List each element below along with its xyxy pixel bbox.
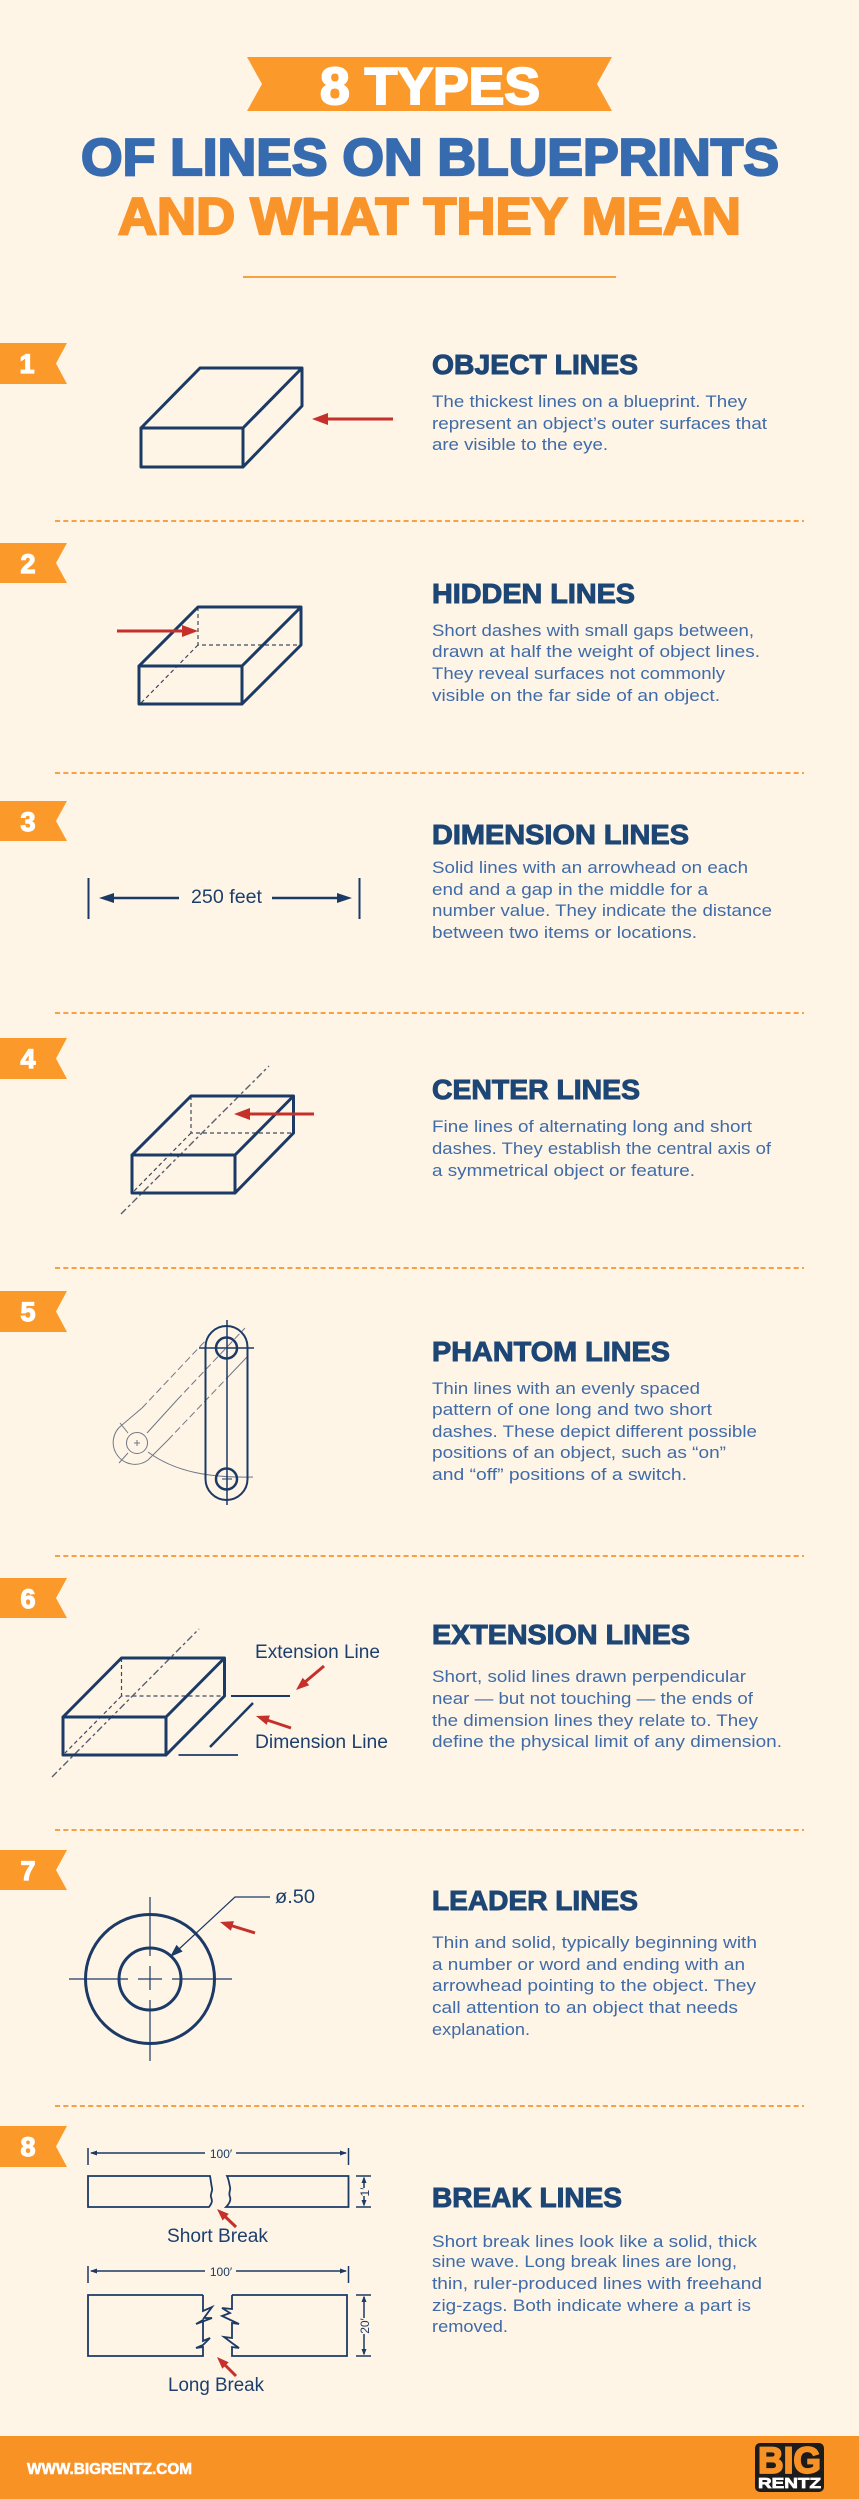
description: center lines: a symmetrical object or feature. <box>432 1161 695 1180</box>
description: hidden lines: visible on the far side of an object. <box>432 686 720 705</box>
title line: of lines on blueprints: OF LINES ON BLUEPRINTS <box>81 129 779 187</box>
icon: solid box with arrow <box>141 368 393 467</box>
label: dimension line: Dimension Line <box>255 1732 388 1753</box>
description: dimension lines: end and a gap in the middle for a <box>432 880 709 899</box>
number flag 4: 4 <box>20 1044 36 1074</box>
number flag 3: 3 <box>20 807 36 837</box>
red arrows <box>256 1666 324 1728</box>
heading: leader lines: LEADER LINES <box>432 1885 638 1916</box>
description: leader lines: explanation. <box>432 2020 530 2039</box>
icon: short break: 100′ <box>210 2147 233 2161</box>
logo: big rentz: RENTZ <box>758 2475 821 2492</box>
section 6: extension lines <box>0 1578 782 1777</box>
icon: box with hidden dashes and arrow <box>117 607 301 704</box>
description: phantom lines: and “off” positions of a switch. <box>432 1465 687 1484</box>
number flag 7: 7 <box>20 1856 36 1886</box>
description: break lines <box>432 2232 762 2336</box>
description: hidden lines: Short dashes with small gaps between, <box>432 621 754 640</box>
icon: box with extension and dimension lines <box>52 1629 388 1777</box>
description: leader lines: a number or word and ending with an <box>432 1955 745 1974</box>
description: phantom lines: Thin lines with an evenly spaced <box>432 1379 700 1398</box>
logo: big rentz: BIG <box>758 2440 821 2481</box>
heading: phantom lines: PHANTOM LINES <box>432 1336 670 1367</box>
number flag 6 <box>0 1578 67 1618</box>
icon: dimension line 250 feet <box>88 878 360 919</box>
title ribbon: 8 types: 8 TYPES <box>320 58 540 116</box>
footer <box>0 2436 859 2499</box>
section 3: dimension lines <box>0 801 772 942</box>
number flag 1: 1 <box>19 349 35 379</box>
description: extension lines: the dimension lines they relate to. They <box>432 1711 759 1730</box>
number flag 7 <box>0 1850 67 1890</box>
heading: center lines: CENTER LINES <box>432 1074 640 1105</box>
description: extension lines: Short, solid lines drawn perpendicular <box>432 1667 746 1686</box>
description: dimension lines <box>432 858 772 942</box>
number flag 6: 6 <box>20 1584 36 1614</box>
description: center lines: dashes. They establish the central axis of <box>432 1139 771 1158</box>
section 5: phantom lines <box>0 1291 757 1505</box>
label: diameter value: ø.50 <box>275 1887 315 1908</box>
description: object lines <box>432 392 767 454</box>
title ribbon: 8 types <box>247 57 612 116</box>
number flag 1 <box>0 343 67 384</box>
description: phantom lines: positions of an object, such as “on” <box>432 1443 726 1462</box>
icon: concentric circles with leader line <box>69 1887 315 2061</box>
section 4: center lines <box>0 1038 771 1214</box>
description: phantom lines: dashes. These depict different possible <box>432 1422 757 1441</box>
icon: short break: 1′ <box>358 2187 372 2196</box>
section 1: object lines <box>0 343 767 467</box>
title underline <box>243 276 616 278</box>
description: phantom lines: pattern of one long and two short <box>432 1400 712 1419</box>
description: dimension lines: number value. They indicate the distance <box>432 901 772 920</box>
icon: slotted link with phantom position <box>113 1320 254 1505</box>
icon: box with center line and arrow <box>121 1066 314 1214</box>
description: dimension lines: between two items or locations. <box>432 923 697 942</box>
description: extension lines: define the physical limit of any dimension. <box>432 1732 782 1751</box>
icon: long break: 20′ <box>358 2317 372 2334</box>
description: center lines: Fine lines of alternating long and short <box>432 1117 752 1136</box>
description: dimension lines: Solid lines with an arrowhead on each <box>432 858 748 877</box>
description: hidden lines: They reveal surfaces not commonly <box>432 664 726 683</box>
description: object lines: represent an object’s outer surfaces that <box>432 414 767 433</box>
section 8: break lines <box>0 2126 762 2396</box>
description: break lines: removed. <box>432 2317 508 2336</box>
number flag 2: 2 <box>20 549 36 579</box>
description: leader lines: arrowhead pointing to the object. They <box>432 1976 757 1995</box>
footer url: WWW.BIGRENTZ.COM <box>27 2461 192 2478</box>
description: break lines: thin, ruler-produced lines with freehand <box>432 2274 762 2293</box>
label: short break: Short Break <box>167 2226 269 2247</box>
description: leader lines <box>432 1933 757 2039</box>
description: extension lines: near — but not touching — the ends of <box>432 1689 753 1708</box>
description: break lines: Short break lines look like a solid, thick <box>432 2232 758 2251</box>
title line: and what they mean: AND WHAT THEY MEAN <box>118 188 741 246</box>
number flag 8: 8 <box>20 2132 36 2162</box>
label: extension line: Extension Line <box>255 1642 380 1663</box>
number flag 8 <box>0 2126 67 2167</box>
number flag 5 <box>0 1291 67 1332</box>
icon: long break: 100′ <box>210 2265 233 2279</box>
description: break lines: sine wave. Long break lines are long, <box>432 2252 737 2271</box>
heading: break lines: BREAK LINES <box>432 2182 622 2213</box>
description: extension lines <box>432 1667 782 1751</box>
icon: dimension line 250 feet: 250 feet <box>191 887 263 908</box>
number flag 5: 5 <box>20 1297 36 1327</box>
number flag 3 <box>0 801 67 841</box>
red arrow <box>217 2357 236 2376</box>
description: break lines: zig-zags. Both indicate where a part is <box>432 2296 751 2315</box>
heading: hidden lines: HIDDEN LINES <box>432 578 635 609</box>
description: object lines: The thickest lines on a blueprint. They <box>432 392 748 411</box>
section 2: hidden lines <box>0 543 760 705</box>
description: hidden lines <box>432 621 760 705</box>
heading: object lines: OBJECT LINES <box>432 349 638 380</box>
heading: dimension lines: DIMENSION LINES <box>432 819 689 850</box>
description: center lines <box>432 1117 771 1180</box>
description: leader lines: call attention to an object that needs <box>432 1998 738 2017</box>
heading: extension lines: EXTENSION LINES <box>432 1619 690 1650</box>
red arrow <box>217 2209 236 2227</box>
description: hidden lines: drawn at half the weight of object lines. <box>432 642 760 661</box>
label: long break: Long Break <box>168 2375 264 2396</box>
number flag 2 <box>0 543 67 583</box>
description: object lines: are visible to the eye. <box>432 435 608 454</box>
header <box>81 57 779 278</box>
description: leader lines: Thin and solid, typically beginning with <box>432 1933 757 1952</box>
icon: long break <box>88 2265 372 2396</box>
icon: short break <box>88 2147 372 2247</box>
section 7: leader lines <box>0 1850 757 2061</box>
description: phantom lines <box>432 1379 757 1484</box>
red arrow <box>220 1921 255 1933</box>
number flag 4 <box>0 1038 67 1079</box>
